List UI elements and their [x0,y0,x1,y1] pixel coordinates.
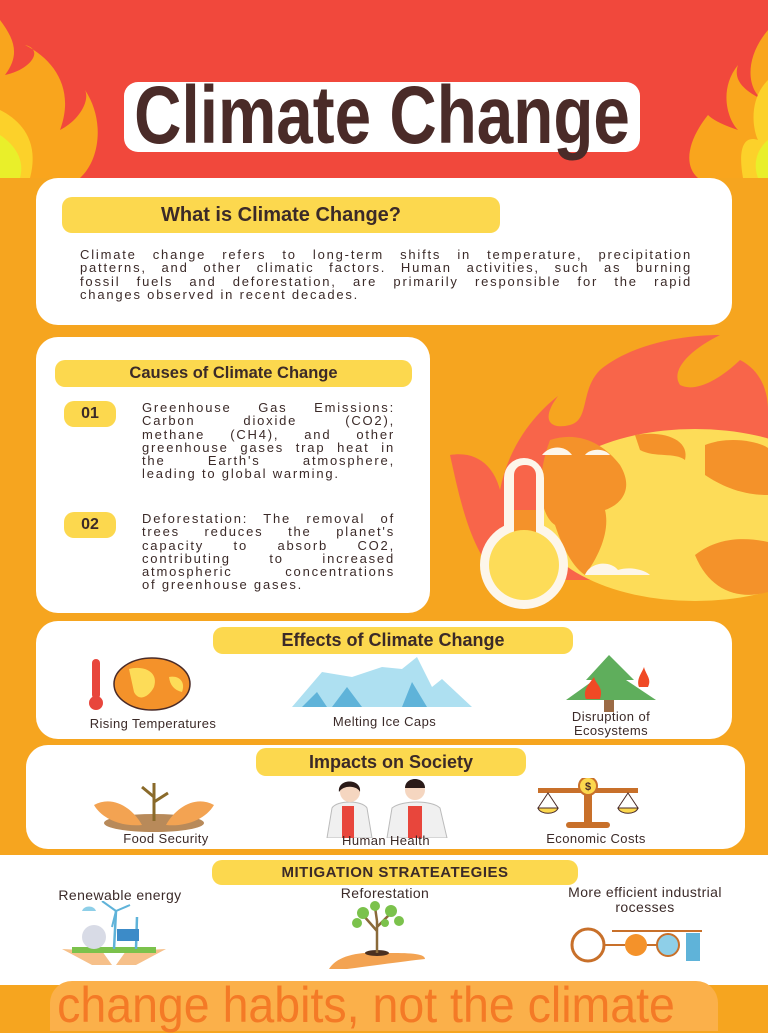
heading [55,360,412,387]
heading [212,860,578,885]
icon: rising temperatures [89,657,191,711]
cause 01: leading to global warming. [142,466,340,481]
text block [80,247,692,302]
label: Rising Temperatures [90,716,216,731]
cause 01: Greenhouse Gas Emissions: [142,400,395,415]
label: industrial processes: More efficient industrial [568,884,722,900]
label: Disruption of Ecosystems [572,709,650,738]
icon: melting ice caps [292,657,472,707]
cause 02: of greenhouse gases. [142,577,303,592]
cause 01: methane (CH4), and other [142,427,395,442]
panel: impacts on society [26,745,745,849]
heading [213,627,573,654]
label: Economic Costs [546,831,646,846]
text block: fossil fuels and deforestation, are primarily responsible for the rapid [80,274,692,289]
heading: Causes of Climate Change [129,364,338,382]
heading: Effects of Climate Change [281,630,505,650]
cause 01: the Earth's atmosphere, [142,453,395,468]
label: Melting Ice Caps [333,714,436,729]
text block: Climate change refers to long-term shifts in temperature, precipitation [80,247,692,262]
cause 01 [64,400,395,481]
heading [256,748,526,776]
label: renewable energy: Renewable energy [58,887,182,903]
cause 01: greenhouse gases trap heat in [142,440,395,455]
heading: What is Climate Change? [161,204,401,226]
icon: disruption of ecosystems [566,655,656,712]
cause 02 [64,511,395,592]
heading: MITIGATION STRATEATEGIES [282,864,508,881]
heading: Impacts on Society [309,752,473,772]
slogan banner: change habits, not the climate [57,977,675,1033]
cause 01: Carbon dioxide (CO2), [142,413,395,428]
cause 02: trees reduces the planet's [142,524,395,539]
decorative flames left [0,20,98,178]
panel: what is climate change [36,178,732,325]
heading [62,197,500,233]
panel: causes [36,337,430,613]
panel: effects [36,621,732,739]
text block: changes observed in recent decades. [80,287,359,302]
label: industrial processes: rocesses [615,899,675,915]
panel: mitigation strategies [0,855,768,985]
label: industrial processes [568,884,722,915]
label: Food Security [123,831,209,846]
icon: human health [326,779,448,838]
icon: food security [94,783,214,832]
icon: economic costs: $ [585,781,591,793]
cause 01: 01 [81,405,99,422]
header band [0,0,768,178]
cause 02: Deforestation: The removal of [142,511,395,526]
icon: reforestation [329,901,425,969]
label: Human Health [342,833,430,848]
decorative flames right [689,30,768,178]
cause 02: capacity to absorb CO2, [142,538,395,553]
illustration: burning globe with thermometer [450,335,768,609]
cause 02: contributing to increased [142,551,395,566]
cause 02: atmospheric concentrations [142,564,395,579]
label: reforestation: Reforestation [341,885,429,901]
icon: industrial processes [570,928,702,962]
icon: renewable energy [62,901,166,965]
icon: economic costs [537,778,639,828]
title: Climate Change [134,70,630,161]
text block: patterns, and other climatic factors. Human activities, such as burning [80,260,692,275]
cause 02: 02 [81,516,99,533]
